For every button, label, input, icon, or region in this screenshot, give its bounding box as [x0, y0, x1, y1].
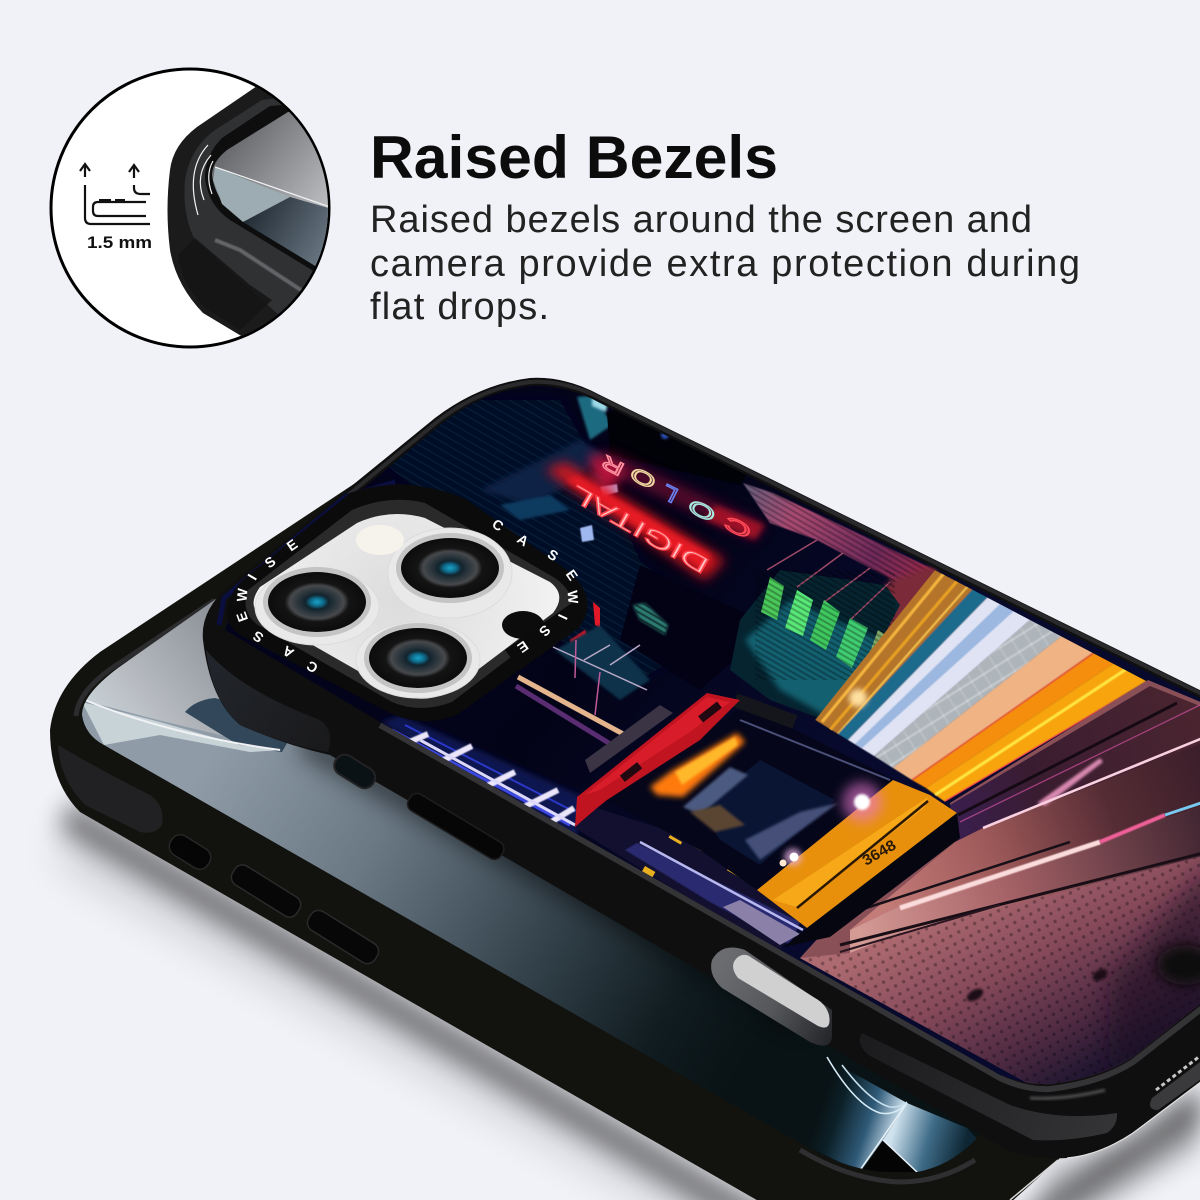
front case camera-side bumper — [206, 650, 330, 752]
lens: top right — [396, 533, 504, 603]
neon sign: COLOR: O — [685, 494, 719, 526]
magnified phone corner — [168, 87, 328, 336]
speaker grille — [1150, 1056, 1200, 1110]
road — [800, 680, 1200, 1090]
CASEWISE ring lettering — [233, 516, 582, 676]
bus — [575, 693, 960, 950]
CASEWISE ring lettering: C — [303, 658, 321, 676]
description text: camera provide extra protection during — [370, 243, 1080, 285]
dark blue tower blocks — [380, 395, 760, 690]
icon: front phone side button — [405, 790, 507, 862]
description text: Raised bezels around the screen and — [370, 199, 1032, 241]
wallpaper base — [200, 370, 1200, 1110]
icon: back phone volume down — [304, 907, 382, 967]
CASEWISE ring lettering: W — [564, 590, 582, 605]
pink building strip — [743, 482, 935, 584]
glass canopy lattice — [553, 625, 650, 715]
icon: front phone mute switch — [331, 751, 379, 792]
back case corner bumper — [58, 745, 162, 833]
camera flash — [356, 525, 404, 555]
CASEWISE ring lettering: W — [233, 587, 251, 602]
phone wallpaper: neon city bus — [200, 370, 1200, 1110]
lens bumps — [255, 528, 512, 698]
CASEWISE ring lettering: E — [515, 638, 531, 656]
bus windshield — [607, 705, 895, 890]
neon sign: COLOR: L — [658, 479, 682, 507]
icon: back phone volume up — [228, 862, 304, 920]
front phone — [200, 370, 1200, 1158]
icon: back phone action button — [166, 831, 214, 873]
shadow cast by front phone on back glass — [287, 744, 716, 982]
camera bevel — [246, 500, 572, 708]
bus destination display — [650, 733, 745, 797]
CASEWISE ring lettering: E — [563, 567, 581, 583]
front case lower rim — [380, 725, 1200, 1089]
CASEWISE ring lettering: C — [489, 516, 507, 534]
back case bottom rim highlight — [800, 1150, 975, 1182]
ring band over lidar — [505, 600, 580, 670]
description text: flat drops. — [370, 286, 549, 328]
light trails — [815, 565, 1148, 802]
lidar sensor — [502, 611, 544, 639]
description text — [370, 199, 1080, 328]
neon sign: COLOR — [602, 454, 750, 537]
back phone case — [50, 482, 1060, 1200]
front case body — [203, 378, 1200, 1158]
lens: left — [263, 567, 371, 637]
CASEWISE ring lettering: S — [250, 628, 266, 646]
front case corner highlight — [1030, 1090, 1105, 1098]
front case lower bumper — [860, 1033, 1117, 1140]
bus headlights — [842, 782, 882, 822]
camera white plateau — [254, 514, 559, 699]
title: Raised Bezels — [370, 124, 778, 191]
lit ledge — [518, 677, 625, 735]
front case outer edge highlight — [1067, 1075, 1200, 1158]
camera ring — [226, 485, 587, 721]
camera module — [219, 482, 587, 721]
CASEWISE ring lettering: S — [261, 553, 279, 571]
screen sliver around camera ring — [219, 482, 395, 625]
phone shadow on backdrop — [60, 800, 1200, 1200]
neon sign: COLOR: R — [598, 451, 628, 479]
back case inner rim — [76, 600, 215, 716]
neon sign glow — [545, 452, 765, 580]
bus number: 3648 — [860, 837, 899, 869]
neon sign: DIGITAL: DIGITAL — [566, 480, 713, 579]
neon sign: COLOR: C — [721, 511, 755, 543]
bezel height label: 1.5 mm — [87, 233, 152, 252]
back case body — [50, 480, 1200, 1200]
bus yellow body — [757, 780, 957, 928]
CASEWISE ring lettering: A — [279, 643, 297, 661]
blue and white city lights — [380, 715, 590, 838]
teal building with green windows — [730, 540, 900, 722]
back phone glass — [82, 598, 980, 1172]
bus lower front and city reflections — [575, 808, 800, 950]
callout: bezel detail circle — [51, 60, 340, 347]
CASEWISE ring lettering: E — [284, 536, 300, 554]
port: silver charging button — [711, 948, 832, 1046]
bezel height icon — [80, 164, 150, 224]
front case top rim — [235, 382, 1200, 698]
lens: bottom — [364, 623, 472, 693]
CASEWISE ring lettering: S — [545, 546, 561, 564]
CASEWISE ring lettering: I — [244, 571, 260, 583]
CASEWISE ring lettering: A — [514, 531, 532, 549]
CASEWISE ring lettering: E — [233, 610, 251, 624]
bus red roof — [575, 693, 740, 827]
CASEWISE ring lettering: I — [555, 612, 571, 622]
back case edge highlight — [1010, 1160, 1058, 1200]
CASEWISE ring lettering: S — [536, 622, 554, 640]
neon sign: COLOR: O — [626, 462, 660, 494]
